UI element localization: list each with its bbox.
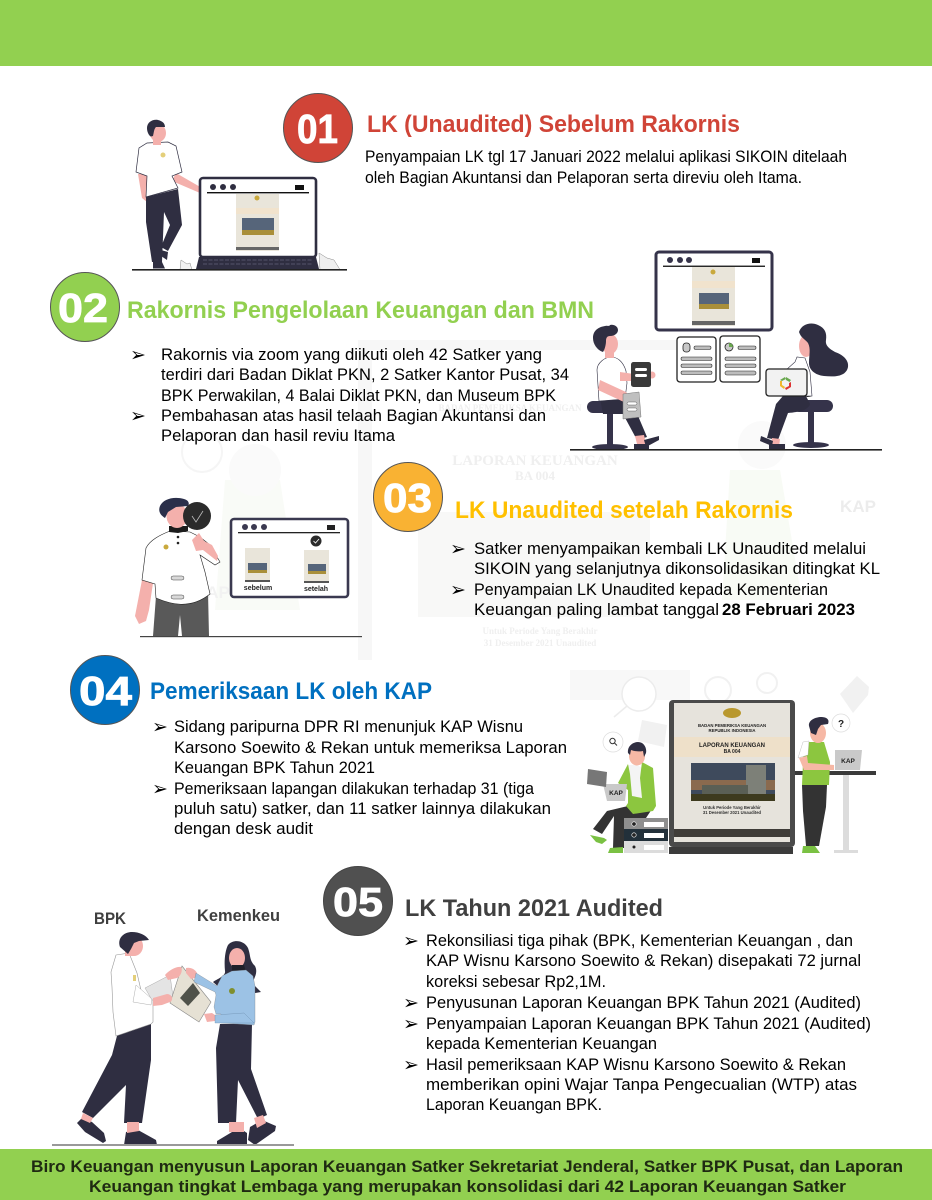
text block 03: Keuangan paling lambat tanggal [474,601,719,619]
text block 05: koreksi sebesar Rp2,1M. [426,973,606,991]
text block 03: Satker menyampaikan kembali LK Unaudited melalui [474,540,866,558]
heading 04: Pemeriksaan LK oleh KAP [150,678,432,705]
label BPK: BPK [94,910,126,928]
right stool [793,400,833,412]
Kemenkeu legs [216,1024,267,1123]
left auditor pants and shoes [593,806,654,848]
header band [0,0,932,66]
text block 04: puluh satu) satker, dan 11 satker lainnya dilakukan [174,800,551,818]
footer band [0,1149,932,1200]
label Kemenkeu: Kemenkeu [197,907,280,925]
text block 05: ➢ [403,992,419,1014]
BPK person shirt [111,953,153,1036]
background watermark: report cover and figures: AP [206,583,230,602]
text block 05: ➢ [403,1054,419,1076]
background watermark: report cover and figures: LAPORAN KEUANGAN [452,453,618,469]
left laptop [603,784,627,801]
text block 02: ➢ [130,405,146,427]
right laptop [835,750,862,770]
left arm [135,580,153,624]
section 05 [52,866,871,1146]
laptop screen [200,178,316,257]
text block 05: KAP Wisnu Karsono Soewito & Rekan) disepakati 72 jurnal [426,952,861,970]
right auditor [802,785,827,846]
illustration: auditors and report tablet: KAP [609,790,624,797]
text block 03: Penyampaian LK Unaudited kepada Kementerian [474,581,828,599]
text block 03: ➢ [450,538,466,560]
hands [165,967,182,980]
heading 02: Rakornis Pengelolaan Keuangan dan BMN [127,297,594,324]
text block 05: Laporan Keuangan BPK. [426,1096,602,1114]
illustration: auditors and report tablet: KAP [841,758,856,765]
laptop keyboard [196,257,319,269]
number badge 03: 03 [383,475,432,521]
heading 01: LK (Unaudited) Sebelum Rakornis [367,111,740,138]
text block 01: Penyampaian LK tgl 17 Januari 2022 melalui aplikasi SIKOIN ditelaah [365,148,847,166]
desk [795,771,876,775]
shirt [142,531,220,604]
illustration: person approving report: setelah [304,586,328,593]
background watermark: report cover and figures: BADAN PEMERIKSA KEUANGAN [438,403,582,413]
text block 02: BPK Perwakilan, 4 Balai Diklat PKN, dan Museum BPK [161,387,556,405]
number badge 05: 05 [333,879,383,925]
text block 05: kepada Kementerian Keuangan [426,1035,657,1053]
number badge 04: 04 [79,668,132,714]
section 02 [50,252,882,451]
text block 02: Pembahasan atas hasil telaah Bagian Akuntansi dan [161,407,546,425]
text block 05: Hasil pemeriksaan KAP Wisnu Karsono Soewito & Rekan [426,1056,846,1074]
illustration: person with laptop [132,120,347,271]
text block 04: Keuangan BPK Tahun 2021 [174,759,375,777]
text block 02: Rakornis via zoom yang diikuti oleh 42 Satker yang [161,346,542,364]
left auditor jacket [627,765,644,801]
folder and search icon [587,769,607,787]
text block 03: SIKOIN yang selanjutnya dikonsolidasikan ditingkat KL [474,560,880,578]
text block 02: Pelaporan dan hasil reviu Itama [161,427,396,445]
section 03 [135,462,880,637]
text block 05: ➢ [403,930,419,952]
tablet body [669,700,795,847]
report thumbnail [236,194,279,251]
illustration: person approving report [135,498,362,637]
footer band: Keuangan tingkat Lembaga yang merupakan konsolidasi dari 42 Laporan Keuangan Satker [89,1178,847,1196]
check badge [183,502,211,530]
text block 04: Pemeriksaan lapangan dilakukan terhadap 31 (tiga [174,780,535,798]
number badge 02: 02 [58,285,108,331]
data cards [677,337,716,382]
number badge 01: 01 [297,106,338,152]
left person [600,395,647,440]
illustration: auditors and report tablet: 31 Desember 2021 Unaudited [703,810,762,815]
text block 01: oleh Bagian Akuntansi dan Pelaporan serta direviu oleh Itama. [365,169,802,187]
shared screen [656,252,772,330]
text block 05: memberikan opini Wajar Tanpa Pengecualian (WTP) atas [426,1076,857,1094]
text block 05: Penyampaian Laporan Keuangan BPK Tahun 2021 (Audited) [426,1015,871,1033]
text block 05: ➢ [403,1013,419,1035]
BPK person legs [82,1023,151,1123]
illustration: auditors and report tablet: ? [838,719,844,730]
text block 02: terdiri dari Badan Diklat PKN, 2 Satker Kantor Pusat, 34 [161,366,569,384]
text block 03 [450,538,880,619]
report cover [674,703,790,842]
number badge 01 [284,94,352,162]
text block 04: ➢ [152,716,168,738]
section 01 [132,94,847,271]
text block 02: ➢ [130,344,146,366]
text block 05: Penyusunan Laporan Keuangan BPK Tahun 2021 (Audited) [426,994,861,1012]
illustration: auditors and report tablet: BA 004 [724,749,741,755]
left stool [587,401,627,413]
text block 01 [365,148,847,187]
footer band: Biro Keuangan menyusun Laporan Keuangan Satker Sekretariat Jenderal, Satker BPK Pusat, dan Laporan [31,1158,903,1176]
text block 04: ➢ [152,778,168,800]
report being handed over [145,975,173,1000]
background watermark: report cover and figures: KAP [840,497,876,516]
screen with before and after [231,519,348,597]
building photo [691,763,775,801]
background watermark: report cover and figures: Untuk Periode Yang Berakhir [483,626,597,636]
Kemenkeu person hair [213,941,261,996]
text block 05: Rekonsiliasi tiga pihak (BPK, Kementerian Keuangan , dan [426,932,853,950]
heading 05: LK Tahun 2021 Audited [405,895,663,922]
text block 04: Karsono Soewito & Rekan untuk memeriksa Laporan [174,739,567,757]
background watermark: report cover and figures [182,340,876,703]
faint magnifier and folder [622,677,656,711]
background watermark: report cover and figures: 31 Desember 2021 Unaudited [484,638,596,648]
section 04 [70,656,876,854]
illustration: auditors and report tablet [587,676,876,854]
text block 04 [152,716,567,838]
SIKOIN logo [780,377,791,390]
text block 04: dengan desk audit [174,820,313,838]
background watermark: report cover and figures: BA 004 [515,468,556,483]
text block 04: Sidang paripurna DPR RI menunjuk KAP Wisnu [174,718,523,736]
illustration: auditors and report tablet: LAPORAN KEUANGAN [699,743,765,749]
gray pants [153,592,209,636]
heading 03: LK Unaudited setelah Rakornis [455,497,793,524]
stacked files [624,818,668,829]
illustration: person approving report: sebelum [244,585,272,592]
illustration: auditors and report tablet: Untuk Periode Yang Berakhir [703,805,761,810]
plants [180,260,192,270]
illustration: auditors and report tablet: BADAN PEMERIKSA KEUANGAN [698,723,766,728]
number badge 05 [324,866,392,936]
text block 02 [130,344,569,445]
illustration: BPK hands report to Kemenkeu [52,907,294,1146]
Kemenkeu blue jacket [194,970,255,1025]
number badge 02 [50,272,120,342]
illustration: auditors and report tablet: REPUBLIK INDONESIA [708,728,756,733]
text block 03: ➢ [450,579,466,601]
text block 05 [403,930,871,1114]
collar and head [169,526,188,533]
number badge 03 [374,462,442,532]
BPK head [125,936,143,956]
question bubble [832,714,850,732]
number badge 04 [70,656,140,724]
text block 03: 28 Februari 2023 [722,601,855,619]
right person [767,396,810,440]
illustration: meeting with shared screen [570,252,882,451]
